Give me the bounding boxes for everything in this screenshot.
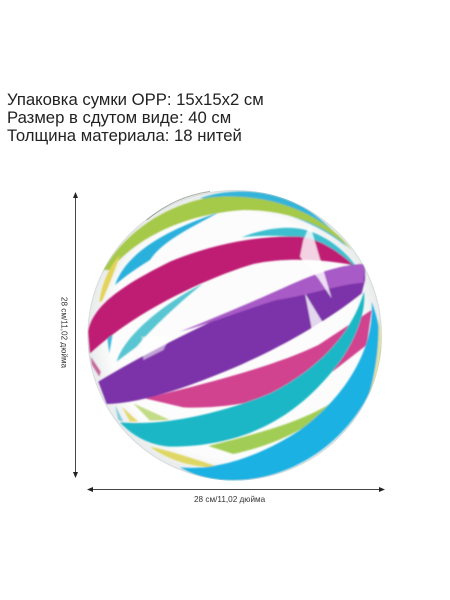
band: top blue: [200, 191, 347, 247]
band: teal: [120, 292, 364, 447]
band: lower left pale stripes: [122, 407, 138, 422]
text block: specifications: Размер в сдутом виде: 40 см: [7, 108, 231, 127]
band: pink lower: [145, 310, 372, 408]
streak: teal top: [242, 226, 356, 266]
text block: specifications: [7, 90, 264, 145]
icon: striped beach ball: [87, 190, 382, 481]
text block: specifications: Упаковка сумки OPP: 15x15x2 см: [7, 90, 264, 109]
highlight: purple light upper: [180, 264, 365, 332]
band: lower green: [208, 404, 329, 455]
band: purple: [98, 264, 365, 404]
label: vertical size: 28 см/11,02 дюйма: [60, 297, 68, 368]
label: horizontal size: 28 см/11,02 дюйма: [194, 495, 265, 504]
band: lower yellow: [150, 447, 220, 467]
arc: dark top-left edge: [147, 191, 210, 220]
streak: yellow left: [99, 255, 120, 302]
streak: blue upper left: [115, 213, 218, 285]
arrow: horizontal dimension: [87, 487, 385, 492]
streak: blue left: [107, 330, 113, 353]
highlights: white reflections: [300, 225, 332, 298]
text block: specifications: Толщина материала: 18 нитей: [7, 126, 242, 145]
streak: teal reflection: [117, 283, 203, 362]
rim: ball outline: [88, 191, 381, 480]
arrow: vertical dimension: [73, 192, 78, 478]
rim: right pale yellow: [366, 316, 382, 402]
stripe: magenta left tip: [91, 357, 101, 377]
band: top green: [103, 196, 352, 270]
band: blue: [180, 302, 382, 481]
band: magenta: [88, 236, 353, 353]
